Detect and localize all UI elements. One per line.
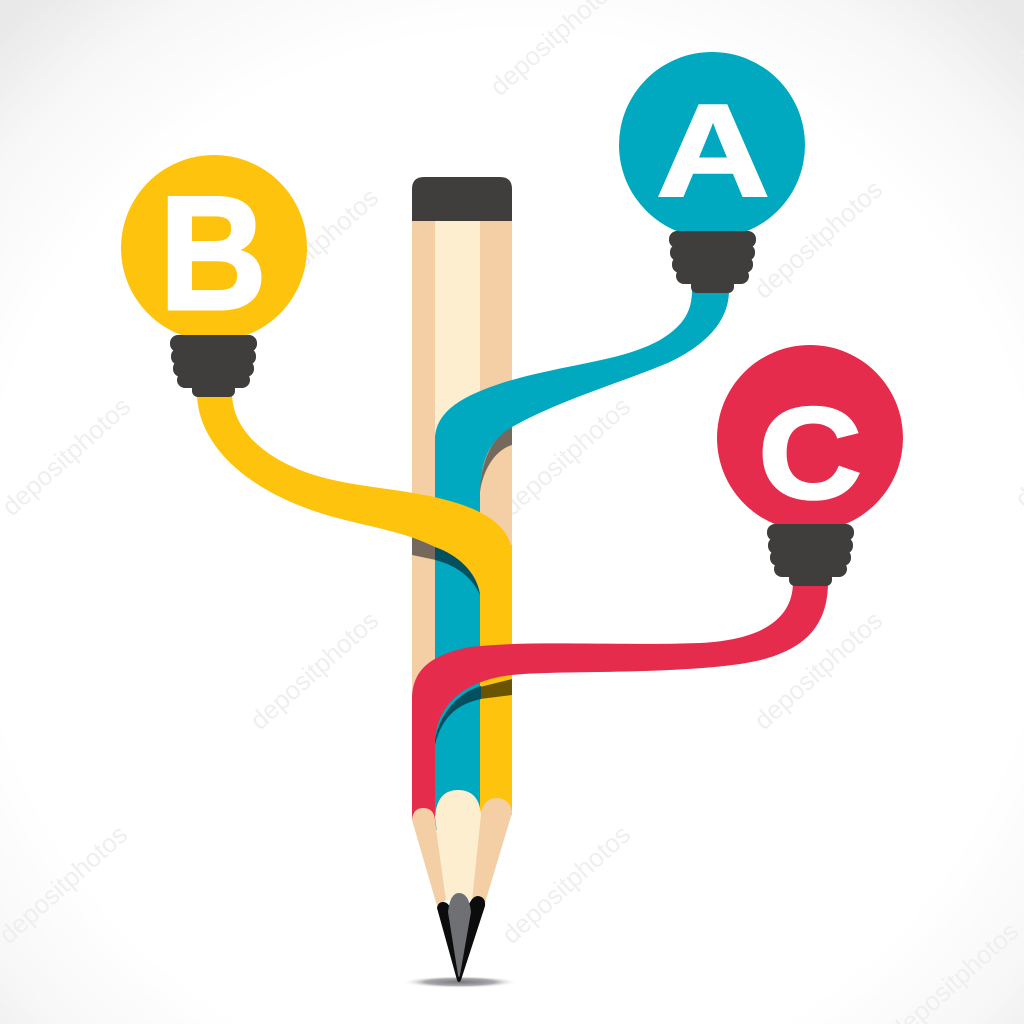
stripe: yellow — [480, 545, 512, 825]
tip centre facet — [435, 790, 481, 900]
centre stripe — [435, 215, 480, 445]
watermark text: depositphotos — [244, 605, 384, 736]
letter B: B — [159, 162, 267, 343]
bulb A — [619, 52, 805, 293]
lead grey centre — [448, 893, 471, 977]
tip left facet — [412, 808, 446, 906]
pencil lead — [437, 893, 485, 982]
watermark text: depositphotos — [244, 182, 384, 313]
watermark text: depositphotos — [748, 605, 888, 736]
socket B — [170, 335, 257, 397]
bulb C — [717, 345, 903, 586]
shadow under yellow ribbon — [412, 537, 480, 595]
watermark text: depositphotos — [748, 174, 888, 305]
socket A — [669, 231, 756, 293]
globe B — [121, 155, 307, 341]
shadow under teal ribbon — [480, 427, 512, 492]
shadow on teal — [435, 686, 481, 745]
wood barrel — [412, 215, 512, 805]
eraser cap — [412, 177, 512, 221]
globe A — [619, 52, 805, 238]
lead left black — [437, 902, 460, 982]
shadow on yellow — [480, 679, 512, 699]
stripe: teal — [435, 540, 480, 830]
ribbon: yellow to bulb B — [197, 393, 512, 680]
socket C — [767, 524, 854, 586]
watermark text: depositphotos — [496, 819, 636, 950]
watermark text: depositphotos — [496, 391, 636, 522]
ground shadow — [402, 976, 518, 988]
pencil body — [412, 177, 512, 830]
ribbon: red to bulb C — [412, 582, 828, 820]
ribbon: teal to bulb A — [435, 290, 729, 545]
shadow on wood — [412, 537, 436, 560]
tip right facet — [472, 798, 512, 903]
shadow on teal — [435, 545, 480, 595]
letter C: C — [758, 380, 862, 526]
bulb B — [121, 155, 307, 397]
letter A: A — [656, 76, 770, 224]
pencil wood tip — [412, 790, 512, 906]
shadow under red ribbon — [435, 679, 512, 745]
lead right black — [458, 896, 485, 982]
globe C — [717, 345, 903, 531]
